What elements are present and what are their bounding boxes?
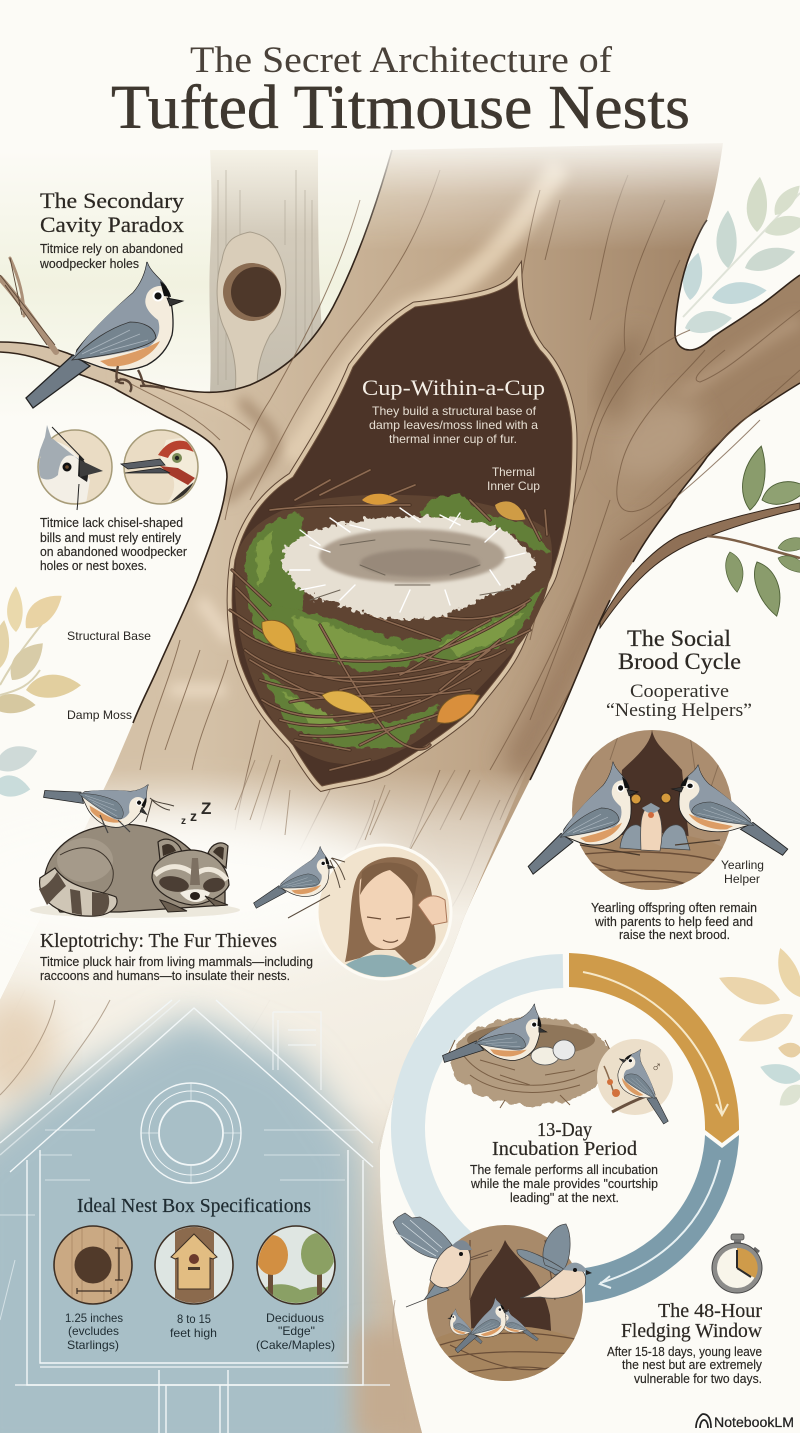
text: fledging description: the nest but are extremely <box>622 1358 763 1372</box>
green leaf branch right <box>600 444 800 628</box>
heading: secondary cavity paradox: The Secondary <box>40 188 184 213</box>
moss layers <box>245 493 550 748</box>
illustration: fledging nest <box>393 1213 595 1394</box>
cycle ring <box>408 953 739 1303</box>
heading: fledging window: The 48-Hour <box>658 1300 762 1322</box>
icon: titmouse bill closeup <box>38 425 112 510</box>
illustration: sleeping raccoon <box>30 824 240 918</box>
label: hole size <box>65 1311 123 1352</box>
subheading: nesting helpers <box>606 682 752 721</box>
text: incubation description: leading" at the next. <box>510 1191 619 1205</box>
blueprint background <box>0 1015 425 1433</box>
lower trunk fade <box>0 740 540 1433</box>
sleeping zzz: Z <box>201 799 211 818</box>
segment: light blue <box>408 971 563 1253</box>
text: chisel bills: on abandoned woodpecker <box>40 545 187 559</box>
label: yearling helper <box>721 858 764 886</box>
white glow behind raccoon <box>0 810 400 960</box>
chick left <box>448 1309 482 1344</box>
heading: social brood cycle: The Social <box>627 626 731 651</box>
chick right <box>499 1309 538 1341</box>
autumn leaves <box>255 612 305 660</box>
label: habitat: "Edge" <box>278 1324 315 1338</box>
text: incubation description: The female performs all incubation <box>470 1163 658 1177</box>
main title: The Secret Architecture of <box>190 40 613 81</box>
right parent bird <box>672 765 788 855</box>
label: height: feet high <box>170 1326 217 1340</box>
woodpecker hole <box>223 263 281 321</box>
text: yearling description: Yearling offspring often remain <box>591 901 757 915</box>
icon: deciduous edge <box>256 1226 340 1310</box>
icon: bird plucking raccoon fur <box>41 736 174 858</box>
heading: social brood cycle <box>618 626 741 674</box>
text: chisel bills: bills and must rely entirely <box>40 531 182 545</box>
heading: secondary cavity paradox: Cavity Paradox <box>40 212 184 237</box>
text: cup description: damp leaves/moss lined with a <box>369 418 538 432</box>
sleeping zzz <box>181 799 211 827</box>
tan corner <box>0 995 57 1105</box>
illustration: incubating nest <box>441 981 615 1108</box>
raccoon tail <box>39 868 117 916</box>
heading: social brood cycle: Brood Cycle <box>618 649 741 674</box>
label: damp moss: Damp Moss <box>67 708 132 722</box>
text: yearling description <box>591 901 757 942</box>
subheading: nesting helpers: “Nesting Helpers” <box>606 701 752 721</box>
text: secondary cavity subtitle: woodpecker holes <box>39 257 139 271</box>
heading: incubation period: Incubation Period <box>492 1138 637 1160</box>
text: chisel bills <box>40 516 187 573</box>
label: hole size: (evcludes <box>68 1324 119 1338</box>
nest bowl <box>235 495 552 764</box>
icon: box on tree <box>155 1225 233 1305</box>
decorative leaves top right <box>680 176 800 337</box>
tan streak lines below nest <box>0 755 480 1095</box>
icon: titmouse perched on branch <box>26 262 183 408</box>
sleeping zzz: z <box>190 808 197 824</box>
chick centre <box>452 1297 512 1353</box>
woven nest <box>230 470 552 770</box>
heading: incubation period <box>492 1119 637 1160</box>
heading: cup within a cup: Cup-Within-a-Cup <box>362 375 545 400</box>
text: kleptotrichy description <box>40 955 313 983</box>
label: height: 8 to 15 <box>177 1312 211 1326</box>
heading: secondary cavity paradox <box>40 188 184 237</box>
text: cup description <box>369 404 538 446</box>
label: thermal inner cup: Thermal <box>492 465 535 479</box>
nest cavity <box>232 277 572 786</box>
text: kleptotrichy description: Titmice pluck hair from living mammals—including <box>40 955 313 969</box>
text: fledging description <box>607 1345 763 1386</box>
text: cup description: They build a structural base of <box>372 404 537 418</box>
sleeping zzz: z <box>181 816 186 827</box>
heading: fledging window <box>621 1300 762 1342</box>
icon: male with food: ♂ <box>651 1059 662 1076</box>
decorative leaves bottom right <box>715 945 800 1112</box>
text: incubation description <box>470 1163 658 1205</box>
text: fledging description: After 15-18 days, young leave <box>607 1345 762 1359</box>
subheading: nesting helpers: Cooperative <box>630 682 729 702</box>
text: chisel bills: Titmice lack chisel-shaped <box>40 516 183 530</box>
label: structural base: Structural Base <box>67 629 151 643</box>
text: fledging description: vulnerable for two days. <box>634 1372 762 1386</box>
label: habitat: Deciduous <box>266 1311 324 1325</box>
text: yearling description: raise the next brood. <box>619 928 730 942</box>
icon: male with food <box>597 1039 691 1125</box>
text: secondary cavity subtitle <box>39 242 183 271</box>
sky tint <box>0 150 400 420</box>
raccoon head <box>152 839 229 905</box>
heading: fledging window: Fledging Window <box>621 1320 762 1342</box>
icon: stopwatch <box>712 1234 762 1293</box>
chicks <box>620 803 690 851</box>
heading: incubation period: 13-Day <box>537 1119 592 1141</box>
decorative leaves left <box>0 586 82 798</box>
label: hole size: Starlings) <box>67 1338 119 1352</box>
label: yearling helper: Helper <box>724 872 760 886</box>
segment: blue arrow <box>585 1135 739 1303</box>
flying bird right <box>517 1224 592 1298</box>
text: incubation description: while the male provides "courtship <box>470 1177 658 1191</box>
label: habitat: (Cake/Maples) <box>256 1338 335 1352</box>
text: kleptotrichy description: raccoons and humans—to insulate their nests. <box>40 969 290 983</box>
main title: Tufted Titmouse Nests <box>111 74 690 142</box>
icon: bird with hair on twig <box>253 838 345 918</box>
fur inner cup <box>282 508 535 620</box>
label: height <box>170 1312 217 1340</box>
bird feet <box>115 366 165 392</box>
heading: kleptotrichy: Kleptotrichy: The Fur Thieves <box>40 930 277 952</box>
icon: hole size <box>54 1225 132 1305</box>
illustration: helpers feeding chicks <box>528 730 788 897</box>
label: thermal inner cup <box>487 465 540 493</box>
illustration: woman plucked hair <box>317 845 451 990</box>
icon: woodpecker bill closeup <box>121 430 200 510</box>
label: habitat <box>256 1311 335 1352</box>
segment: gold arrow <box>569 953 739 1143</box>
blueprint house lines <box>0 1000 390 1433</box>
food items <box>631 794 641 804</box>
main title <box>111 40 690 142</box>
NotebookLM logo: NotebookLM <box>714 1414 794 1430</box>
text: yearling description: with parents to help feed and <box>594 915 753 929</box>
text: secondary cavity subtitle: Titmice rely on abandoned <box>40 242 183 256</box>
twigs <box>230 470 547 770</box>
heading: ideal nest box: Ideal Nest Box Specifications <box>77 1195 311 1217</box>
text: chisel bills: holes or nest boxes. <box>40 559 147 573</box>
background trunk with woodpecker hole <box>209 150 322 392</box>
label: thermal inner cup: Inner Cup <box>487 479 540 493</box>
left parent bird <box>528 762 638 874</box>
text: cup description: thermal inner cup of fur. <box>389 432 517 446</box>
label: hole size: 1.25 inches <box>65 1311 123 1325</box>
flying bird left <box>393 1213 492 1307</box>
label: yearling helper: Yearling <box>721 858 764 872</box>
